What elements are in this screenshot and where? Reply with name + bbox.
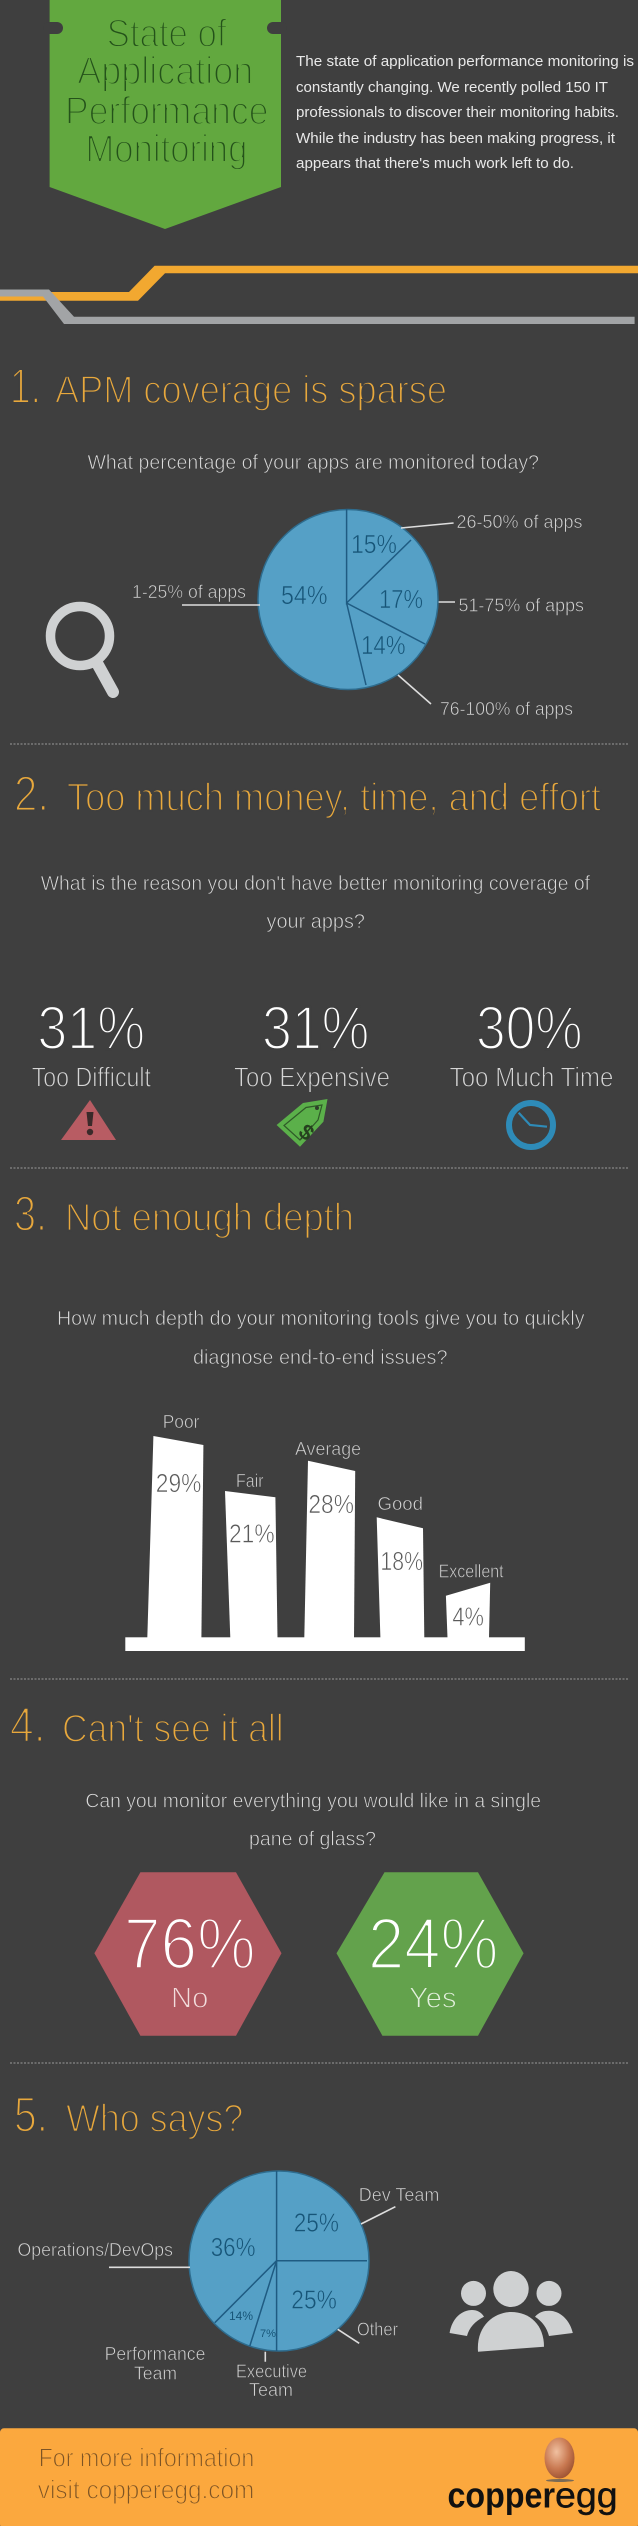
- stat: too expensive: [234, 994, 390, 1147]
- bar: fair: [225, 1470, 278, 1638]
- icon: people group: [450, 2271, 573, 2352]
- pie labels: app coverage: [132, 511, 584, 719]
- section 1 heading: 1.: [10, 360, 41, 414]
- header stripes: [0, 266, 638, 324]
- intro text: [296, 54, 634, 172]
- footer text: [38, 2443, 254, 2504]
- footer text: visit copperegg.com: [38, 2474, 254, 2504]
- pie chart: app coverage: 14%: [361, 630, 406, 660]
- pie chart: app coverage: 54%: [281, 580, 328, 610]
- title banner: Application: [77, 50, 253, 93]
- stat: too difficult: [32, 994, 151, 1140]
- stat: too expensive: 31%: [262, 994, 369, 1062]
- bar: excellent: Excellent: [439, 1561, 504, 1582]
- section 2 heading: [14, 768, 601, 822]
- section 2 heading: 2.: [14, 768, 49, 822]
- hexagon: yes 24%: [336, 1872, 524, 2036]
- stat: too difficult: Too Difficult: [32, 1062, 151, 1093]
- bar: good: [377, 1493, 424, 1638]
- bar: excellent: [439, 1561, 504, 1638]
- pie chart: respondents: 25%: [291, 2284, 337, 2314]
- stat: too difficult: 31%: [37, 994, 145, 1062]
- logo: copperegg: copper: [448, 2474, 555, 2515]
- pie labels: respondents: Dev Team: [359, 2184, 439, 2205]
- section 2 question: [41, 873, 590, 933]
- title banner: Monitoring: [85, 128, 247, 171]
- pie labels: respondents: Performance: [105, 2343, 205, 2364]
- hexagon: no 76%: 76%: [124, 1904, 256, 1984]
- section 1 heading: [10, 360, 447, 414]
- icon: price tag: $: [294, 1119, 319, 1146]
- section 4 question: pane of glass?: [249, 1829, 376, 1851]
- section 4 heading: Can't see it all: [62, 1708, 284, 1751]
- stat: too much time: [450, 994, 614, 1147]
- icon: price tag: [277, 1099, 328, 1147]
- hexagon: yes 24%: Yes: [409, 1982, 456, 2014]
- section 4 heading: [10, 1699, 284, 1753]
- bar: poor: 29%: [156, 1468, 201, 1498]
- hexagon: no 76%: [94, 1872, 282, 2036]
- pie chart: respondents: 14%: [229, 2309, 253, 2323]
- pie labels: respondents: Operations/DevOps: [18, 2239, 173, 2260]
- pie chart: respondents: 7%: [260, 2328, 276, 2340]
- bar: average: [295, 1438, 361, 1638]
- stat: too expensive: Too Expensive: [234, 1062, 390, 1093]
- logo: copperegg: egg: [555, 2474, 618, 2515]
- bar: average: Average: [295, 1438, 361, 1459]
- title banner: Performance: [65, 90, 268, 133]
- bar: fair: 21%: [229, 1519, 275, 1549]
- bar: average: 28%: [308, 1489, 354, 1519]
- pie labels: app coverage: 1-25% of apps: [132, 581, 246, 602]
- section 5 heading: [14, 2089, 243, 2143]
- section 1 question: What percentage of your apps are monitored today?: [88, 452, 539, 474]
- section 1 heading: APM coverage is sparse: [55, 369, 447, 412]
- pie labels: respondents: [18, 2184, 439, 2400]
- section 3 heading: 3.: [14, 1188, 47, 1242]
- pie chart: app coverage: 15%: [351, 529, 397, 559]
- stat: too much time: Too Much Time: [450, 1062, 614, 1093]
- pie labels: app coverage: 26-50% of apps: [456, 511, 582, 532]
- footer: [0, 2428, 638, 2526]
- section 2 question: What is the reason you don't have better monitoring coverage of: [41, 873, 590, 895]
- footer text: For more information: [39, 2443, 254, 2473]
- section 2 heading: Too much money, time, and effort: [67, 777, 601, 820]
- title banner: [43, 0, 287, 229]
- icon: clock: [509, 1103, 553, 1147]
- intro text: constantly changing. We recently polled 150 IT: [296, 80, 608, 96]
- hexagon: no 76%: No: [171, 1982, 208, 2014]
- section 3 question: [57, 1308, 585, 1369]
- intro text: appears that there's much work left to do.: [296, 156, 574, 172]
- pie chart: app coverage: [258, 509, 438, 690]
- pie labels: respondents: Executive: [236, 2360, 307, 2381]
- logo: copperegg: [448, 2438, 618, 2515]
- section 3 heading: Not enough depth: [65, 1197, 354, 1240]
- section 4 heading: 4.: [10, 1699, 46, 1753]
- bar: poor: Poor: [163, 1411, 199, 1432]
- pie labels: app coverage: 51-75% of apps: [458, 595, 584, 616]
- icon: warning triangle: [61, 1100, 116, 1140]
- chart baseline: [125, 1637, 525, 1651]
- section 3 question: How much depth do your monitoring tools give you to quickly: [57, 1308, 585, 1330]
- section 2 question: your apps?: [266, 911, 365, 933]
- section 4 question: [85, 1791, 541, 1851]
- bar: poor: [147, 1411, 203, 1638]
- intro text: While the industry has been making progress, it: [296, 131, 615, 147]
- section 5 heading: 5.: [14, 2089, 48, 2143]
- bar: fair: Fair: [236, 1470, 264, 1491]
- stat: too much time: 30%: [476, 994, 583, 1062]
- section 4 question: Can you monitor everything you would like in a single: [85, 1791, 541, 1813]
- pie labels: app coverage: 76-100% of apps: [440, 698, 573, 719]
- pie labels: respondents: Other: [357, 2319, 398, 2340]
- title banner: State of: [107, 13, 227, 56]
- bar: good: Good: [378, 1493, 423, 1514]
- section 3 question: diagnose end-to-end issues?: [193, 1347, 448, 1369]
- pie chart: respondents: [189, 2171, 369, 2351]
- icon: magnifying glass: [50, 606, 113, 692]
- bar: excellent: 4%: [452, 1602, 484, 1632]
- bar: good: 18%: [380, 1546, 423, 1576]
- intro text: professionals to discover their monitoring habits.: [296, 105, 619, 121]
- bar chart: monitoring depth: [125, 1411, 525, 1651]
- section 3 heading: [14, 1188, 354, 1242]
- intro text: The state of application performance monitoring is: [296, 54, 634, 70]
- pie chart: respondents: 36%: [211, 2232, 256, 2262]
- pie chart: respondents: 25%: [294, 2208, 339, 2238]
- section 5 heading: Who says?: [66, 2098, 243, 2141]
- hexagon: yes 24%: 24%: [368, 1904, 498, 1984]
- pie labels: respondents: Team: [134, 2362, 177, 2383]
- pie chart: app coverage: 17%: [379, 584, 423, 614]
- pie labels: respondents: Team: [249, 2379, 293, 2400]
